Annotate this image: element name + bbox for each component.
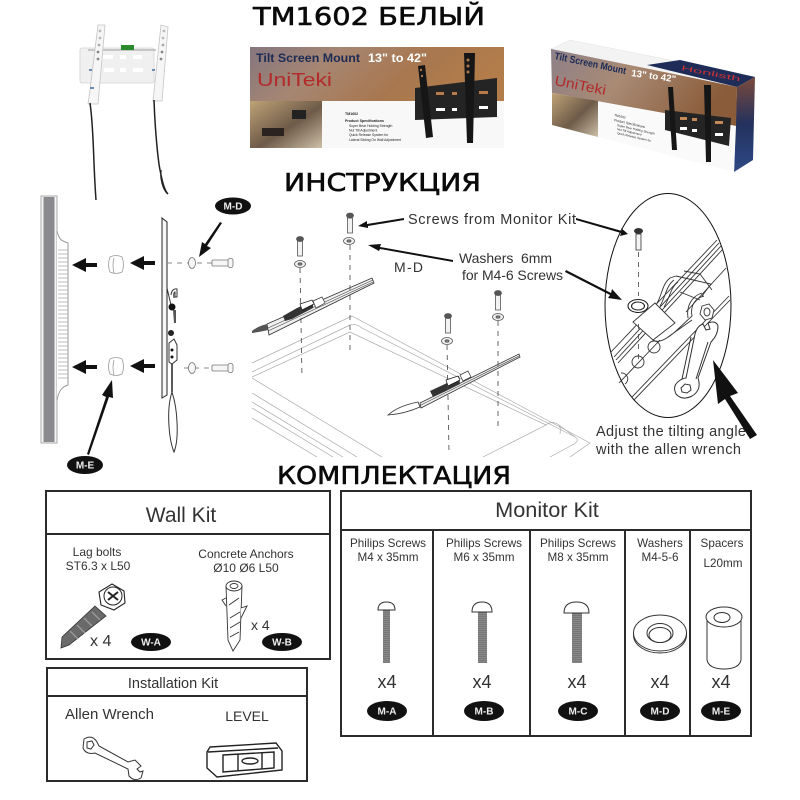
box front view: Product Specifications xyxy=(345,119,384,123)
icon: lag bolt xyxy=(61,584,125,648)
item: M4 screws: Philips Screws xyxy=(350,537,426,550)
item: M4 screws: M4 x 35mm xyxy=(357,551,419,564)
box angled view: TM1602 xyxy=(614,113,626,120)
dashed lines xyxy=(300,245,498,452)
heading: wall kit: Wall Kit xyxy=(146,504,216,527)
box angled view: Honlisth xyxy=(681,65,741,83)
item: washers: M4-5-6 xyxy=(641,551,679,564)
box angled view: Product Specifications xyxy=(614,118,646,129)
arrow to washer xyxy=(199,222,222,257)
heading: installation kit: Installation Kit xyxy=(128,676,218,692)
lag bolts text: Lag bolts xyxy=(73,545,121,559)
icon: level xyxy=(207,743,282,777)
label: washers xyxy=(459,250,563,283)
item: M6 screws xyxy=(446,537,522,721)
item: spacers: L20mm xyxy=(704,557,742,570)
rail detail xyxy=(611,240,730,400)
title: TM1602 white: TM1602 БЕЛЫЙ xyxy=(252,2,485,31)
box front view: Tilt Screen Mount xyxy=(256,53,360,65)
item: M4 screws: x4 xyxy=(377,672,397,692)
diagram: side view assembly xyxy=(41,196,251,474)
box front view xyxy=(250,47,504,148)
concrete anchors text: Concrete Anchors xyxy=(198,547,294,561)
box angled view: 13" to 42" xyxy=(631,68,677,85)
box angled view: UniTeki xyxy=(553,72,608,98)
photo: white tilt mount xyxy=(80,25,168,200)
dashed guides xyxy=(167,263,212,368)
quantity: x 4 xyxy=(251,617,270,633)
item: M8 screws: Philips Screws xyxy=(540,537,616,550)
badge W-A xyxy=(131,633,171,651)
label: washers: for M4-6 Screws xyxy=(462,267,563,283)
spacers xyxy=(108,256,124,376)
arrow: screw callout xyxy=(576,218,628,236)
item: M8 screws: x4 xyxy=(567,672,587,692)
box front view: Lateral Sliding On Wall Adjustment xyxy=(349,138,401,142)
box front view: Nut Tilt Adjustment xyxy=(349,128,377,132)
label: adjust angle xyxy=(595,424,746,458)
arrow to washer xyxy=(368,244,453,262)
arrow: washer callout xyxy=(565,270,622,300)
quantity: x 4 xyxy=(90,633,111,650)
label: adjust angle: Adjust the tilting angle xyxy=(596,424,746,440)
concrete anchors text xyxy=(198,547,294,575)
screw and washer set xyxy=(294,213,504,344)
box angled view: Quick Release System for xyxy=(617,131,651,143)
arrow to spacer xyxy=(87,380,113,455)
item: M4 screws: M-A xyxy=(378,706,396,718)
box angled view: Super Bear Holding Strength xyxy=(617,123,655,136)
icon: anchor xyxy=(222,581,247,651)
panel: wall kit xyxy=(46,491,330,659)
arrow to screw xyxy=(358,218,404,228)
item: M6 screws: x4 xyxy=(472,672,492,692)
monitor side profile xyxy=(41,196,68,443)
panel: installation kit xyxy=(47,668,307,781)
item: washers: M-D xyxy=(651,706,669,718)
box front view: Super Bear Holding Strength xyxy=(349,124,392,128)
box angled view: Tilt Screen Mount xyxy=(553,51,628,77)
concrete anchors text: Ø10 Ø6 L50 xyxy=(213,561,279,575)
badge W-B xyxy=(262,633,302,651)
item: spacers: Spacers xyxy=(701,537,744,550)
washers and screws xyxy=(188,258,233,374)
item: washers: Washers xyxy=(637,537,683,550)
label M-E xyxy=(67,456,103,474)
label: M-D: M-D xyxy=(394,259,423,275)
box angled view: Nut Tilt Adjustment xyxy=(617,127,642,137)
item: M8 screws xyxy=(540,537,616,721)
wrench in detail xyxy=(675,322,718,398)
monitor outline xyxy=(252,316,590,457)
heading: instructions: ИНСТРУКЦИЯ xyxy=(284,168,481,197)
bracket xyxy=(162,218,177,452)
box front view: UniTeki xyxy=(257,70,332,90)
rails xyxy=(252,278,520,415)
item: washers xyxy=(634,537,686,721)
badge W-B: W-B xyxy=(272,638,292,648)
lag bolts text xyxy=(66,545,131,573)
diagram: rear screws on monitor xyxy=(252,212,590,457)
callout: zoomed detail xyxy=(565,194,757,458)
label: washers: Washers 6mm xyxy=(459,250,552,266)
item: spacers: x4 xyxy=(711,672,731,692)
item: M6 screws: Philips Screws xyxy=(446,537,522,550)
box front view: TM1602 xyxy=(345,112,358,116)
item: M6 screws: M6 x 35mm xyxy=(453,551,515,564)
item: M8 screws: M-C xyxy=(569,706,587,718)
item: spacers xyxy=(701,537,744,721)
screw in detail xyxy=(634,228,643,360)
box front view: Quick Release System for xyxy=(349,133,389,137)
arrow: large pointer xyxy=(713,360,757,439)
lag bolts text: ST6.3 x L50 xyxy=(66,559,131,573)
box angled view xyxy=(551,40,755,172)
label: screws from monitor kit: Screws from Monitor Kit xyxy=(408,212,576,228)
ellipse detail xyxy=(605,194,731,418)
item: washers: x4 xyxy=(650,672,670,692)
arrows to monitor xyxy=(72,256,155,374)
item: M4 screws xyxy=(350,537,426,721)
label: adjust angle: with the allen wrench xyxy=(595,442,741,458)
box front view: 13" to 42" xyxy=(368,53,427,65)
label M-D: M-D xyxy=(224,202,242,212)
icon: wrench xyxy=(83,737,143,780)
panel: monitor kit xyxy=(341,491,751,736)
label: level: LEVEL xyxy=(225,708,269,724)
heading: monitor kit: Monitor Kit xyxy=(495,497,599,522)
label M-D xyxy=(215,198,251,214)
washer in detail xyxy=(628,300,648,312)
item: M6 screws: M-B xyxy=(475,706,493,718)
badge W-A: W-A xyxy=(141,638,161,648)
label: allen wrench: Allen Wrench xyxy=(65,706,154,723)
item: spacers: M-E xyxy=(712,706,730,718)
item: M8 screws: M8 x 35mm xyxy=(547,551,609,564)
label M-E: M-E xyxy=(76,460,94,472)
heading: package contents: КОМПЛЕКТАЦИЯ xyxy=(277,461,511,490)
